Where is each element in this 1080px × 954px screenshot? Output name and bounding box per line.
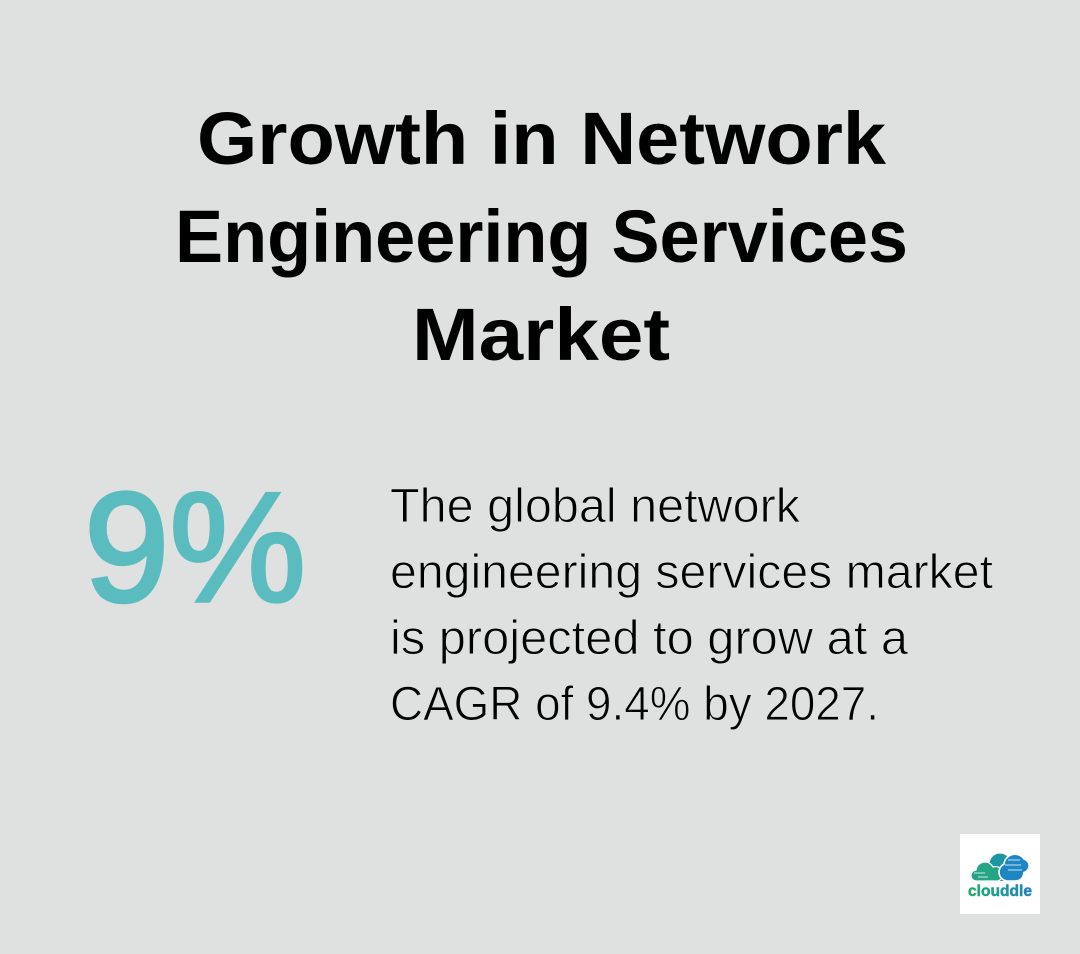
- logo: clouddle: [960, 834, 1040, 914]
- description text: engineering services market: [390, 546, 993, 599]
- title: Market: [412, 293, 670, 376]
- title: Growth in Network: [197, 97, 887, 180]
- description text: CAGR of 9.4% by 2027.: [390, 678, 879, 731]
- title: [175, 97, 908, 376]
- title: Engineering Services: [175, 195, 908, 278]
- description text: is projected to grow at a: [390, 612, 908, 665]
- icon: clouds: [971, 854, 1029, 881]
- description text: The global network: [390, 480, 801, 533]
- big statistic: 9%: 9%: [84, 461, 306, 635]
- description text: [390, 480, 993, 731]
- logo wordmark: clouddle: [968, 883, 1032, 900]
